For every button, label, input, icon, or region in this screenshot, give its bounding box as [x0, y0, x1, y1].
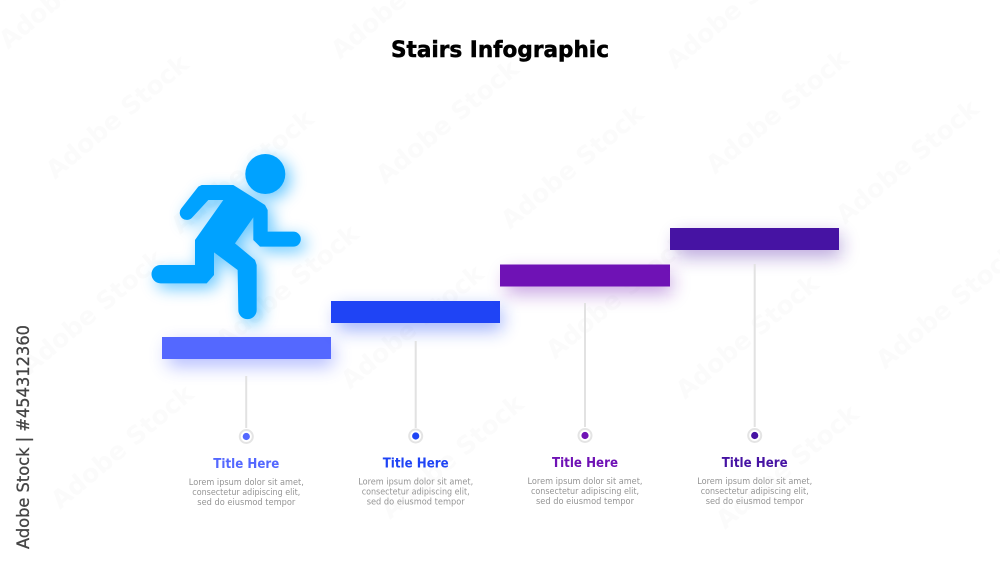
title: Stairs Infographic: [391, 38, 609, 63]
column 4: [697, 264, 812, 507]
watermark pattern: Adobe Stock: [700, 43, 855, 180]
column 2: sed do eiusmod tempor: [367, 498, 465, 508]
watermark pattern: Adobe Stock: [670, 268, 825, 405]
column 2: [358, 341, 473, 508]
column 2: consectetur adipiscing elit,: [362, 488, 470, 498]
stock id side label: Adobe Stock | #454312360: [14, 325, 34, 549]
watermark pattern: Adobe Stock: [335, 258, 490, 395]
column 1: Lorem ipsum dolor sit amet,: [189, 478, 304, 488]
watermark pattern: Adobe Stock: [375, 388, 530, 525]
column 1: sed do eiusmod tempor: [197, 498, 296, 508]
column 4: sed do eiusmod tempor: [706, 497, 804, 507]
column 3: [528, 303, 642, 507]
icon: running person: [151, 154, 306, 324]
column 4: consectetur adipiscing elit,: [701, 487, 809, 497]
column 2: Title Here: [383, 456, 449, 472]
watermark pattern: Adobe Stock: [15, 243, 170, 380]
step 2: [331, 301, 502, 330]
watermark pattern: Adobe Stock: [710, 398, 865, 535]
column 3: consectetur adipiscing elit,: [531, 487, 639, 497]
column 4: Title Here: [722, 456, 788, 471]
column 3: Lorem ipsum dolor sit amet,: [528, 477, 642, 487]
watermark pattern: Adobe Stock: [165, 103, 320, 240]
watermark pattern: Adobe Stock: [495, 98, 650, 235]
step 3: [500, 264, 672, 294]
column 3: sed do eiusmod tempor: [536, 497, 634, 507]
step 4: [670, 228, 841, 257]
watermark pattern: Adobe Stock: [45, 378, 200, 515]
column 3: Title Here: [552, 456, 618, 471]
column 1: Title Here: [213, 457, 279, 472]
column 4: Lorem ipsum dolor sit amet,: [697, 477, 812, 487]
watermark pattern: Adobe Stock: [370, 53, 525, 190]
watermark pattern: Adobe Stock: [830, 93, 985, 230]
column 1: consectetur adipiscing elit,: [192, 488, 300, 498]
watermark pattern: Adobe Stock: [540, 228, 695, 365]
step 1: [162, 337, 333, 366]
column 2: Lorem ipsum dolor sit amet,: [358, 478, 473, 488]
watermark pattern: Adobe Stock: [40, 48, 195, 185]
column 1: [189, 376, 304, 508]
watermark pattern: Adobe Stock: [210, 218, 365, 355]
